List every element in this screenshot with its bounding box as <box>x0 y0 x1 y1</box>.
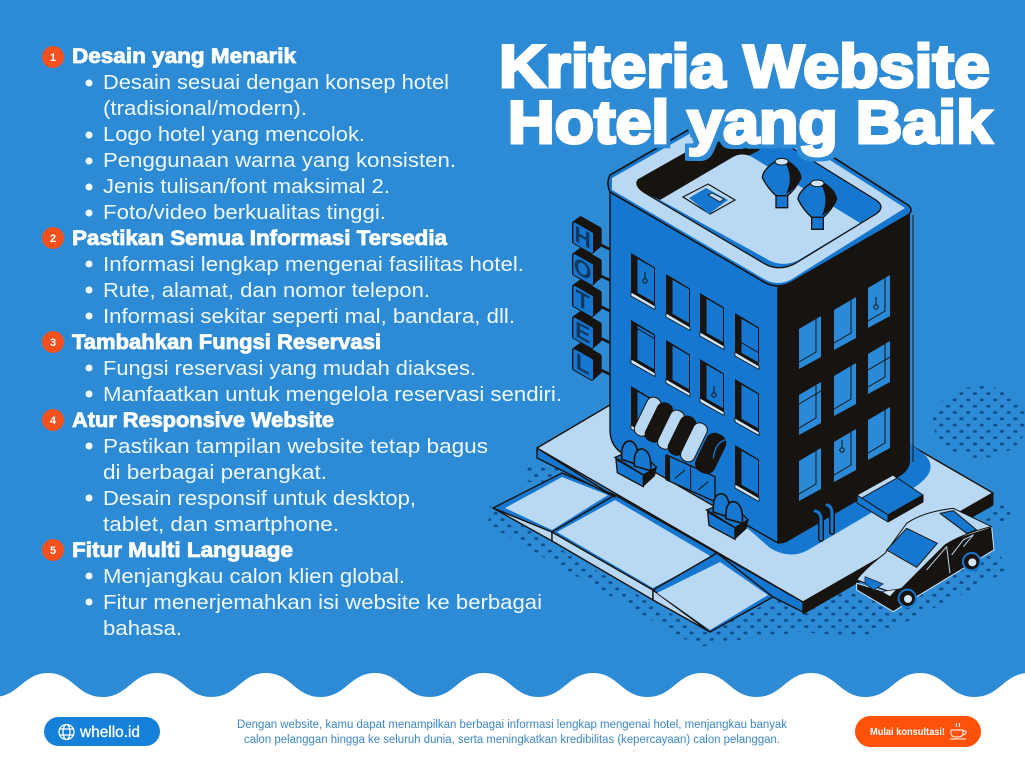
call to action pill: Mulai konsultasi! <box>870 727 945 738</box>
section 2: Pastikan Semua Informasi Tersedia <box>42 227 524 328</box>
hotel illustration <box>493 90 994 632</box>
right wall <box>778 208 910 544</box>
section 3: Tambahkan Fungsi Reservasi: 3 <box>50 337 56 349</box>
car <box>857 508 994 612</box>
section 4: Atur Responsive Website: tablet, dan smartphone. <box>103 513 339 536</box>
section 3: Tambahkan Fungsi Reservasi: Tambahkan Fungsi Reservasi <box>72 331 381 354</box>
section 5: Fitur Multi Language: Menjangkau calon klien global. <box>103 565 405 588</box>
icon: globe <box>59 724 74 740</box>
section 1: Desain yang Menarik: (tradisional/modern). <box>103 97 307 120</box>
roof vents <box>762 158 837 229</box>
hotel sign: E <box>575 316 590 350</box>
halftone dot shadows <box>488 386 1025 648</box>
section 4: Atur Responsive Website: Pastikan tampilan website tetap bagus <box>103 435 488 458</box>
section 2: Pastikan Semua Informasi Tersedia: Pastikan Semua Informasi Tersedia <box>72 227 447 250</box>
section 3: Tambahkan Fungsi Reservasi: Fungsi reservasi yang mudah diakses. <box>103 357 476 380</box>
section 1: Desain yang Menarik: Foto/video berkualitas tinggi. <box>103 201 386 224</box>
section 1: Desain yang Menarik: Penggunaan warna yang konsisten. <box>103 149 456 172</box>
footer text: calon pelanggan hingga ke seluruh dunia, serta meningkatkan kredibilitas (kepercayaan) calon pelanggan. <box>244 734 780 746</box>
section 4: Atur Responsive Website: Desain responsif untuk desktop, <box>103 487 416 510</box>
hotel sign: L <box>576 348 590 381</box>
section 1: Desain yang Menarik: Logo hotel yang mencolok. <box>103 123 365 146</box>
section 3: Tambahkan Fungsi Reservasi <box>42 331 562 406</box>
title: Kriteria Website <box>499 33 990 100</box>
patch above roof <box>690 90 850 150</box>
section 3: Tambahkan Fungsi Reservasi: Manfaatkan untuk mengelola reservasi sendiri. <box>103 383 562 406</box>
section 4: Atur Responsive Website <box>42 409 488 536</box>
footer wave <box>0 673 1025 764</box>
footer text: Dengan website, kamu dapat menampilkan berbagai informasi lengkap mengenai hotel, menjangkau banyak <box>237 719 787 731</box>
icon: coffee cup <box>950 723 966 739</box>
section 5: Fitur Multi Language <box>42 539 542 640</box>
hotel sign: T <box>576 285 590 318</box>
section 2: Pastikan Semua Informasi Tersedia: Informasi lengkap mengenai fasilitas hotel. <box>103 253 524 276</box>
section 2: Pastikan Semua Informasi Tersedia: 2 <box>50 233 56 245</box>
building shadow on plate <box>745 440 931 555</box>
section 5: Fitur Multi Language: bahasa. <box>103 617 182 640</box>
section 5: Fitur Multi Language: 5 <box>50 545 56 557</box>
roof <box>608 99 911 286</box>
windows left wall <box>631 253 759 502</box>
hotel sign <box>574 219 610 381</box>
brand pill: whello.id <box>44 717 160 746</box>
wall pipes <box>815 505 832 539</box>
section 4: Atur Responsive Website: 4 <box>50 415 57 427</box>
section 5: Fitur Multi Language: Fitur Multi Language <box>72 539 293 562</box>
section 4: Atur Responsive Website: di berbagai perangkat. <box>103 461 327 484</box>
entrance door and awning <box>632 395 729 502</box>
section 1: Desain yang Menarik: Desain yang Menarik <box>72 45 296 68</box>
planters <box>615 441 748 539</box>
section 1: Desain yang Menarik: Desain sesuai dengan konsep hotel <box>103 71 449 94</box>
entrance stoop <box>857 475 923 522</box>
left wall <box>610 185 778 543</box>
section 1: Desain yang Menarik <box>42 45 456 224</box>
hotel sign: H <box>574 221 591 255</box>
section 2: Pastikan Semua Informasi Tersedia: Rute, alamat, dan nomor telepon. <box>103 279 430 302</box>
base plate <box>537 402 993 614</box>
section 1: Desain yang Menarik: 1 <box>50 52 56 64</box>
section 5: Fitur Multi Language: Fitur menerjemahkan isi website ke berbagai <box>103 591 542 614</box>
title <box>499 33 993 156</box>
title: Hotel yang Baik <box>508 89 993 156</box>
footer text <box>237 719 787 746</box>
sidewalk slabs and ramps <box>493 473 773 632</box>
section 2: Pastikan Semua Informasi Tersedia: Informasi sekitar seperti mal, bandara, dll. <box>103 305 515 328</box>
call to action pill <box>855 716 981 747</box>
windows right wall <box>799 275 890 501</box>
roof hatch <box>683 184 735 214</box>
hotel sign: O <box>574 252 591 287</box>
brand pill: whello.id: whello.id <box>79 724 140 741</box>
section 1: Desain yang Menarik: Jenis tulisan/font maksimal 2. <box>103 175 390 198</box>
section 4: Atur Responsive Website: Atur Responsive Website <box>72 409 334 432</box>
